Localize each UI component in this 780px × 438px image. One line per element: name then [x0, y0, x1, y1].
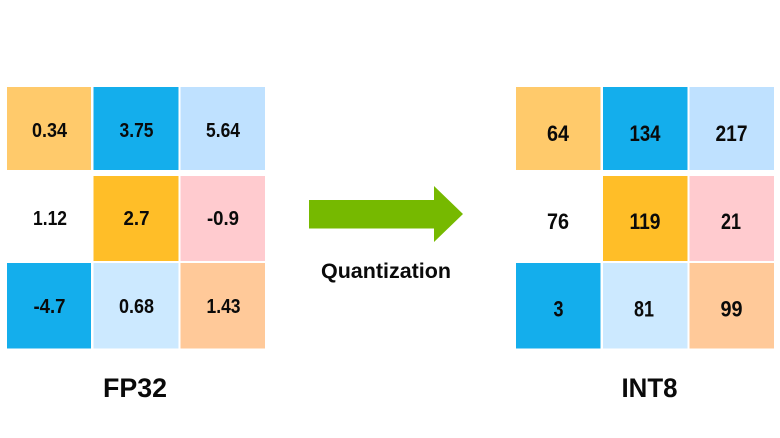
cell: 119	[603, 176, 688, 261]
cell: 5.64	[180, 87, 265, 170]
panel: INT8 matrix	[516, 87, 774, 348]
cell: 76	[516, 176, 600, 261]
cell: 99	[690, 263, 774, 348]
cell: 3	[516, 263, 600, 348]
cell: 99: 99	[720, 296, 742, 322]
cell: 1.12	[7, 176, 91, 261]
cell: 217: 217	[716, 121, 748, 146]
cell: -0.9: -0.9	[207, 208, 239, 230]
cell: 3.75	[94, 87, 178, 170]
cell: 0.68: 0.68	[119, 296, 154, 318]
cell: 1.43	[180, 263, 265, 348]
cell: 81: 81	[634, 296, 654, 322]
label: Quantization: Quantization	[321, 260, 451, 283]
cell: 76: 76	[547, 209, 569, 234]
cell: 1.43: 1.43	[206, 296, 240, 318]
cell: 119: 119	[630, 209, 660, 234]
heading: FP32: FP32	[103, 373, 167, 403]
cell: 5.64: 5.64	[206, 120, 241, 142]
cell: 21	[690, 176, 774, 261]
cell: 217	[690, 87, 774, 170]
panel: FP32 matrix	[7, 87, 265, 348]
cell: 3: 3	[554, 296, 564, 322]
cell: 21: 21	[721, 209, 741, 234]
cell: 134: 134	[630, 121, 661, 146]
cell: 0.68	[94, 263, 178, 348]
arrow: quantization direction	[309, 186, 463, 242]
cell: 2.7: 2.7	[124, 208, 150, 230]
cell: 134	[603, 87, 688, 170]
cell: 3.75: 3.75	[120, 120, 154, 142]
cell: -4.7	[7, 263, 91, 348]
cell: 64: 64	[547, 121, 570, 146]
cell: 0.34: 0.34	[32, 120, 68, 142]
heading: INT8: INT8	[622, 373, 678, 403]
cell: 2.7	[94, 176, 178, 261]
cell: 1.12: 1.12	[33, 208, 67, 230]
cell: 0.34	[7, 87, 91, 170]
cell: -0.9	[180, 176, 265, 261]
cell: 64	[516, 87, 600, 170]
cell: -4.7: -4.7	[34, 296, 66, 318]
cell: 81	[603, 263, 688, 348]
